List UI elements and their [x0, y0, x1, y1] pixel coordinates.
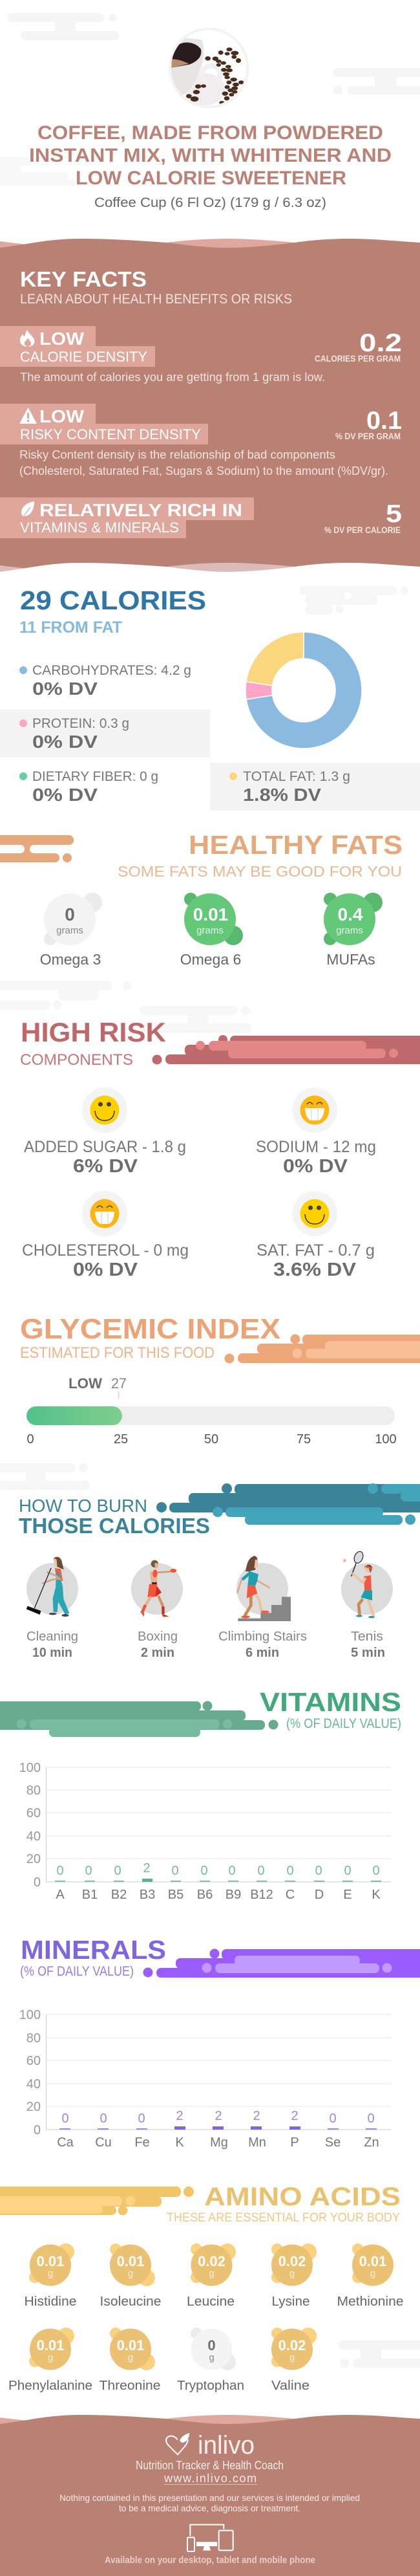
bar chart: vitamins: 80: [26, 1784, 41, 1798]
protein: 0% DV: [32, 732, 98, 752]
sodium: 0% DV: [283, 1156, 348, 1177]
icon: flame: [20, 330, 34, 347]
activity: cleaning: 10 min: [32, 1646, 72, 1660]
bar chart: minerals: [19, 2008, 391, 2150]
gauge label: LOW: [68, 1375, 102, 1392]
panel: amino acids: [0, 2183, 403, 2393]
bar chart: minerals: K: [175, 2135, 184, 2150]
bar chart: vitamins: 0: [315, 1864, 322, 1878]
description: (Cholesterol, Saturated Fat, Sugars & Sodium) to the amount (%DV/gr).: [19, 464, 388, 477]
isoleucine: 0.01: [117, 2253, 144, 2269]
bar chart: minerals: 2: [176, 2109, 184, 2123]
histidine: g: [48, 2268, 53, 2279]
valine: g: [289, 2352, 295, 2363]
carbohydrates: 0% DV: [32, 679, 98, 699]
availability note: Available on your desktop, tablet and mobile phone: [105, 2555, 315, 2566]
threonine: Threonine: [100, 2379, 160, 2393]
heading line 2: THOSE CALORIES: [19, 1514, 210, 1538]
saturated fat: 3.6% DV: [273, 1260, 357, 1280]
illustration: boxer: [131, 1560, 183, 1617]
panel: how to burn those calories: [19, 1483, 420, 1660]
methionine: [337, 2243, 403, 2309]
protein: [19, 716, 129, 752]
panel: minerals: [19, 1935, 420, 2150]
fact: vitamins and minerals: [0, 497, 402, 538]
bar chart: minerals: Mn: [248, 2135, 266, 2150]
subheading: ESTIMATED FOR THIS FOOD: [20, 1344, 215, 1362]
panel: vitamins: [0, 1687, 401, 1902]
panel: footer: [0, 2415, 420, 2576]
bar chart: vitamins: A: [56, 1888, 65, 1902]
phenylalanine: g: [48, 2352, 53, 2363]
bar chart: vitamins: B3: [140, 1888, 155, 1902]
bar chart: vitamins: 0: [286, 1864, 294, 1878]
rating: RELATIVELY RICH IN: [39, 500, 242, 520]
tryptophan: [177, 2328, 244, 2393]
label: CALORIE DENSITY: [20, 349, 147, 365]
activity: tennis: [341, 1550, 393, 1660]
icon: heart and leaf: [166, 2433, 189, 2454]
rating: LOW: [39, 329, 85, 349]
subheading: SOME FATS MAY BE GOOD FOR YOU: [118, 863, 402, 880]
added sugar: 6% DV: [73, 1156, 138, 1177]
bar chart: minerals: Ca: [57, 2135, 74, 2150]
icon: warning: [19, 408, 37, 424]
activity: cleaning: Cleaning: [26, 1630, 78, 1644]
leucine: g: [209, 2268, 215, 2279]
bar chart: vitamins: 0: [228, 1864, 236, 1878]
leucine: [187, 2243, 236, 2309]
illustration: woman sweeping: [26, 1557, 78, 1617]
icon: devices: [187, 2525, 233, 2551]
title: LOW CALORIE SWEETENER: [76, 168, 346, 189]
icon: smile: [300, 1199, 330, 1228]
methionine: 0.01: [359, 2253, 386, 2269]
isoleucine: Isoleucine: [100, 2295, 162, 2309]
title: INSTANT MIX, WITH WHITENER AND: [29, 145, 392, 166]
activity: climbing stairs: 6 min: [246, 1646, 279, 1660]
lysine: [271, 2243, 317, 2309]
icon: grin: [300, 1096, 330, 1124]
bar chart: vitamins: B1: [82, 1888, 98, 1902]
bar chart: minerals: 20: [26, 2100, 41, 2114]
panel: calories: [0, 585, 420, 811]
value: 5: [386, 500, 402, 528]
histidine: [25, 2243, 76, 2309]
total fat: TOTAL FAT: 1.3 g: [243, 769, 350, 784]
panel: key facts: [0, 239, 420, 582]
label: VITAMINS & MINERALS: [20, 519, 179, 536]
bar chart: vitamins: 100: [19, 1761, 41, 1775]
bar chart: vitamins: 40: [26, 1829, 41, 1844]
subheading: COMPONENTS: [20, 1051, 133, 1069]
valine: Valine: [271, 2379, 310, 2393]
bar chart: vitamins: 20: [26, 1852, 41, 1866]
omega 3: grams: [56, 925, 83, 936]
bar chart: minerals: 0: [329, 2112, 337, 2126]
bar chart: vitamins: B12: [250, 1888, 273, 1902]
panel: high risk components: [20, 1017, 420, 1280]
rating: LOW: [39, 406, 85, 426]
activity: cleaning: [26, 1557, 78, 1660]
saturated fat: SAT. FAT - 0.7 g: [257, 1241, 375, 1260]
mufas: MUFAs: [326, 951, 375, 968]
banner shape: [225, 1334, 420, 1364]
legend rows backgrounds and macronutrients: [0, 663, 420, 811]
heading: calories: 29 CALORIES: [20, 585, 206, 615]
activity: boxing: [131, 1560, 183, 1660]
bar chart: minerals: 0: [367, 2112, 375, 2126]
cholesterol: CHOLESTEROL - 0 mg: [22, 1241, 189, 1260]
donut chart: [246, 632, 362, 748]
cholesterol: [22, 1191, 189, 1280]
omega 6: 0.01: [193, 904, 228, 924]
bar chart: vitamins: 0: [85, 1864, 92, 1878]
logo: [166, 2431, 255, 2460]
leucine: 0.02: [198, 2253, 226, 2269]
omega 6: Omega 6: [180, 951, 241, 968]
value: 0.2: [359, 329, 402, 357]
mufas: grams: [336, 925, 363, 936]
valine: [271, 2328, 317, 2393]
bar chart: minerals: 0: [34, 2123, 41, 2137]
banner shape: [0, 2187, 194, 2215]
banner shape: [0, 1701, 278, 1737]
protein: PROTEIN: 0.3 g: [32, 716, 129, 731]
banner shape: [152, 1035, 420, 1065]
added sugar: [24, 1087, 186, 1177]
methionine: g: [370, 2268, 375, 2279]
unit: % DV PER GRAM: [335, 431, 401, 441]
disclaimer: Nothing contained in this presentation and our services is intended or implied: [59, 2493, 360, 2503]
omega 3: Omega 3: [40, 951, 101, 968]
threonine: g: [128, 2352, 133, 2363]
activity: boxing: Boxing: [138, 1630, 178, 1644]
subheading: (% OF DAILY VALUE): [286, 1716, 401, 1731]
fact: calorie density: [0, 326, 402, 384]
omega 3: [40, 893, 102, 968]
carbohydrates: CARBOHYDRATES: 4.2 g: [32, 663, 191, 678]
bar chart: minerals: 2: [215, 2109, 222, 2123]
banner shape: [0, 835, 74, 862]
website: www.inlivo.com: [163, 2472, 257, 2485]
valine: 0.02: [278, 2337, 306, 2353]
bar chart: minerals: 40: [26, 2077, 41, 2091]
gauge label: 27: [111, 1375, 127, 1392]
bar chart: vitamins: 0: [56, 1864, 64, 1878]
dietary fiber: [19, 769, 158, 805]
value: 0.1: [366, 407, 402, 435]
unit: % DV PER CALORIE: [324, 525, 401, 535]
dietary fiber: 0% DV: [32, 785, 98, 805]
bar chart: minerals: Se: [325, 2135, 341, 2150]
cholesterol: 0% DV: [73, 1260, 138, 1280]
subheading: (% OF DAILY VALUE): [20, 1964, 134, 1979]
omega 6: grams: [196, 925, 224, 936]
bar chart: minerals: P: [290, 2135, 299, 2150]
phenylalanine: 0.01: [37, 2337, 64, 2353]
title: COFFEE, MADE FROM POWDERED: [37, 122, 383, 144]
bar chart: minerals: Fe: [134, 2135, 150, 2150]
bar chart: vitamins: [19, 1761, 391, 1902]
sodium: SODIUM - 12 mg: [256, 1138, 376, 1156]
gauge axis: 25: [114, 1432, 128, 1446]
saturated fat: [257, 1191, 375, 1280]
mufas: 0.4: [338, 904, 363, 924]
heading line 1: HOW TO BURN: [19, 1496, 147, 1516]
logo: inlivo: [198, 2431, 255, 2460]
gauge axis: 50: [204, 1432, 218, 1446]
gauge axis: 0: [26, 1432, 34, 1446]
disclaimer: [59, 2493, 360, 2513]
threonine: [100, 2328, 160, 2393]
isoleucine: [100, 2243, 162, 2309]
bar chart: minerals: Mg: [210, 2135, 228, 2150]
bar chart: vitamins: 0: [372, 1864, 380, 1878]
title: [29, 122, 392, 189]
bar chart: vitamins: B5: [168, 1888, 184, 1902]
serving size: Coffee Cup (6 Fl Oz) (179 g / 6.3 oz): [94, 195, 326, 210]
bar chart: vitamins: D: [315, 1888, 324, 1902]
label: RISKY CONTENT DENSITY: [20, 426, 201, 442]
banner shape: [156, 1483, 420, 1525]
leucine: Leucine: [187, 2295, 235, 2309]
bar chart: vitamins: C: [286, 1888, 295, 1902]
isoleucine: g: [128, 2268, 133, 2279]
heading: MINERALS: [21, 1935, 166, 1965]
omega 3: 0: [65, 904, 75, 924]
panel: glycemic index: [20, 1313, 420, 1446]
bar chart: minerals: 60: [26, 2054, 41, 2068]
tryptophan: 0: [207, 2337, 216, 2353]
bar chart: vitamins: B6: [197, 1888, 213, 1902]
tagline: Nutrition Tracker & Health Coach: [136, 2459, 284, 2472]
disclaimer: to be a medical advice, diagnosis or treatment.: [119, 2503, 300, 2513]
panel: healthy fats: [0, 830, 403, 968]
total fat: 1.8% DV: [243, 785, 321, 805]
histidine: 0.01: [37, 2253, 64, 2269]
lysine: g: [289, 2268, 295, 2279]
bar chart: minerals: 0: [100, 2112, 107, 2126]
threonine: 0.01: [117, 2337, 144, 2353]
bar chart: vitamins: B9: [226, 1888, 241, 1902]
heading: HIGH RISK: [21, 1017, 166, 1047]
icon: leaf: [21, 501, 34, 516]
bar chart: vitamins: 0: [200, 1864, 208, 1878]
description: Risky Content density is the relationship of bad components: [19, 448, 335, 461]
sodium: [256, 1087, 376, 1177]
fact: risky content density: [0, 404, 402, 477]
bar chart: vitamins: 0: [344, 1864, 352, 1878]
carbohydrates: [19, 663, 191, 699]
food photo: coffee cup and beans: [170, 29, 247, 107]
bar chart: vitamins: 0: [114, 1864, 121, 1878]
phenylalanine: [8, 2328, 92, 2393]
bar chart: vitamins: 0: [34, 1875, 41, 1890]
gauge axis: 100: [375, 1432, 397, 1446]
gauge axis: [26, 1432, 397, 1446]
activity: boxing: 2 min: [141, 1646, 174, 1660]
bar chart: vitamins: E: [343, 1888, 352, 1902]
banner shape: [143, 1948, 420, 1978]
bar chart: vitamins: 2: [143, 1861, 151, 1875]
bar chart: vitamins: 0: [171, 1864, 179, 1878]
activity: climbing stairs: Climbing Stairs: [218, 1630, 307, 1644]
omega 6: [180, 893, 243, 968]
added sugar: ADDED SUGAR - 1.8 g: [24, 1138, 186, 1156]
bar chart: minerals: 2: [253, 2109, 260, 2123]
activity: climbing stairs: [218, 1556, 307, 1660]
methionine: Methionine: [337, 2295, 403, 2309]
bar chart: minerals: 0: [138, 2112, 145, 2126]
histidine: Histidine: [25, 2295, 76, 2309]
heading: VITAMINS: [260, 1687, 401, 1717]
phenylalanine: Phenylalanine: [8, 2379, 92, 2393]
heading: AMINO ACIDS: [204, 2183, 401, 2211]
bar chart: minerals: 0: [61, 2112, 69, 2126]
mufas: [324, 893, 383, 968]
activity: tennis: 5 min: [351, 1646, 385, 1660]
heading: key facts: KEY FACTS: [20, 267, 147, 291]
illustration: tennis player: [341, 1550, 393, 1618]
bar chart: vitamins: 0: [257, 1864, 265, 1878]
gauge bar: [26, 1392, 395, 1425]
description: [19, 448, 388, 477]
subheading: from fat: 11 FROM FAT: [19, 618, 122, 637]
lysine: 0.02: [278, 2253, 306, 2269]
icon: grin: [90, 1199, 119, 1228]
dietary fiber: DIETARY FIBER: 0 g: [32, 769, 158, 784]
tryptophan: Tryptophan: [177, 2379, 244, 2393]
activity: tennis: Tenis: [351, 1630, 383, 1644]
bar chart: vitamins: 60: [26, 1806, 41, 1820]
heading: GLYCEMIC INDEX: [20, 1313, 280, 1345]
gauge axis: 75: [297, 1432, 311, 1446]
subheading: LEARN ABOUT HEALTH BENEFITS OR RISKS: [20, 292, 292, 307]
total fat: [229, 769, 350, 805]
gauge label: [68, 1375, 127, 1392]
heading: HEALTHY FATS: [189, 830, 403, 860]
subheading: THESE ARE ESSENTIAL FOR YOUR BODY: [167, 2211, 400, 2225]
bar chart: minerals: 2: [291, 2109, 299, 2123]
bar chart: minerals: Cu: [95, 2135, 112, 2150]
icon: smile: [90, 1096, 119, 1124]
bar chart: minerals: 80: [26, 2031, 41, 2046]
lysine: Lysine: [271, 2295, 310, 2309]
unit: CALORIES PER GRAM: [315, 353, 401, 364]
bar chart: minerals: Zn: [364, 2135, 379, 2150]
tryptophan: g: [209, 2352, 215, 2363]
bar chart: vitamins: K: [372, 1888, 381, 1902]
description: The amount of calories you are getting from 1 gram is low.: [20, 371, 325, 384]
illustration: woman on stairs: [236, 1556, 291, 1621]
bar chart: minerals: 100: [19, 2008, 41, 2022]
bar chart: vitamins: B2: [111, 1888, 127, 1902]
